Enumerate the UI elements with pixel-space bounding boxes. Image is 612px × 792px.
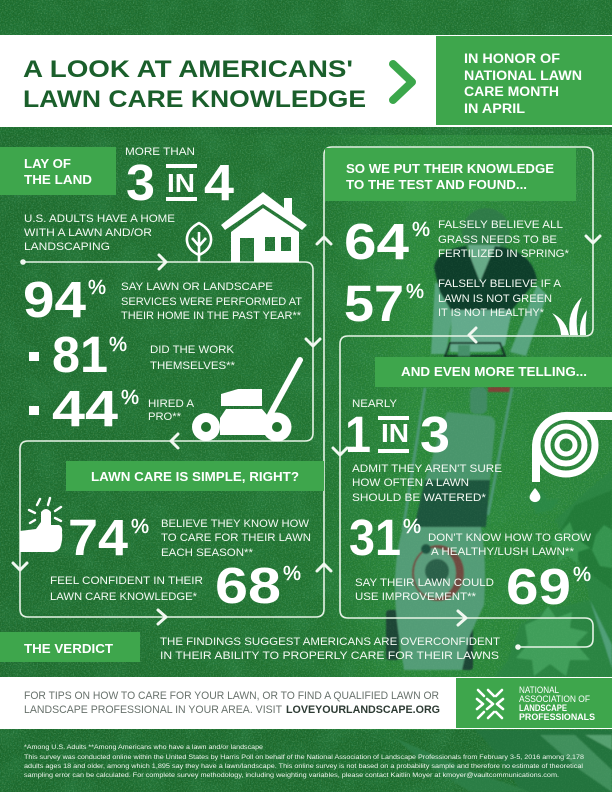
icon: thumbs up <box>20 498 62 552</box>
stat: 64% <box>344 213 570 270</box>
stat: 44% <box>29 380 194 437</box>
stat: 68% <box>50 557 301 614</box>
panel: header band <box>0 35 612 127</box>
stat: nearly 1 in 3: ADMIT THEY AREN'T SURE <box>352 463 502 475</box>
stat: 94% <box>23 271 302 328</box>
stat: 31%: DON'T KNOW HOW TO GROW <box>428 532 591 544</box>
stat: 68%: % <box>283 563 301 585</box>
stat: more than 3 in 4: MORE THAN <box>125 146 195 158</box>
panel: call to action: LANDSCAPE PROFESSIONAL IN YOUR AREA. VISIT <box>24 704 282 716</box>
icon: chevron arrow <box>393 64 412 100</box>
stat: 64%: FERTILIZED IN SPRING* <box>438 248 570 260</box>
stat: more than 3 in 4 <box>125 146 235 211</box>
footnote <box>24 744 584 779</box>
stat: 69% <box>355 558 591 615</box>
title <box>23 56 366 113</box>
text: association name: NATIONAL <box>519 685 559 695</box>
stat: 74%: % <box>131 516 149 538</box>
panel: lawn care is simple: LAWN CARE IS SIMPLE, RIGHT? <box>91 469 299 484</box>
text: adults with a lawn: WITH A LAWN AND/OR <box>24 227 152 239</box>
text: verdict findings: THE FINDINGS SUGGEST AMERICANS ARE OVERCONFIDENT <box>160 636 500 648</box>
panel: association logo <box>456 678 612 728</box>
text: association name: PROFESSIONALS <box>519 712 595 722</box>
stat: 94%: 94 <box>23 271 87 328</box>
panel: and even more telling <box>375 357 612 387</box>
panel: put to the test: SO WE PUT THEIR KNOWLEDGE <box>346 161 554 176</box>
panel: honor box <box>436 36 612 125</box>
icon: grass <box>552 297 587 335</box>
stat: 69%: % <box>573 564 591 586</box>
foliage <box>395 470 612 792</box>
footnote: *Among U.S. Adults **Among Americans who have a lawn and/or landscape <box>24 744 263 751</box>
text: association name: ASSOCIATION OF <box>519 694 590 704</box>
footnote: sampling error can be calculated. For complete survey methodology, including weighting variables, please contact Kaitlin Moyer at kmoyer@vaultcommunications.com. <box>24 772 559 779</box>
flow line with arrows <box>13 147 600 650</box>
panel: honor box: CARE MONTH <box>464 84 559 99</box>
text: adults with a lawn <box>24 213 175 253</box>
stat: 81%: THEMSELVES** <box>150 360 236 372</box>
panel: and even more telling: AND EVEN MORE TELLING... <box>401 364 587 379</box>
stat: more than 3 in 4: 3 <box>126 154 155 211</box>
text: verdict findings <box>160 636 500 662</box>
icon: tree <box>187 223 211 262</box>
panel: put to the test: TO THE TEST AND FOUND... <box>346 177 527 192</box>
panel: honor box: IN APRIL <box>464 101 525 116</box>
panel: call to action: FOR TIPS ON HOW TO CARE FOR YOUR LAWN, OR TO FIND A QUALIFIED LAWN OR <box>24 690 439 702</box>
stat: 81%: 81 <box>52 326 108 383</box>
stat: 57%: IT IS NOT HEALTHY* <box>438 307 545 319</box>
panel: call to action <box>0 677 612 729</box>
panel: honor box: NATIONAL LAWN <box>464 68 582 83</box>
stat: 94%: SERVICES WERE PERFORMED AT <box>121 296 302 308</box>
text: adults with a lawn: U.S. ADULTS HAVE A HOME <box>24 213 175 225</box>
panel: the verdict: THE VERDICT <box>24 641 113 656</box>
panel: the verdict <box>0 632 140 662</box>
stat: 81%: % <box>109 334 127 356</box>
panel: put to the test <box>325 148 576 201</box>
stat: 64%: FALSELY BELIEVE ALL <box>438 219 563 231</box>
stat: 31%: % <box>403 516 421 538</box>
stat: nearly 1 in 3: SHOULD BE WATERED* <box>352 492 487 504</box>
stat: 57%: % <box>406 281 424 303</box>
stat: 81%: DID THE WORK <box>150 344 234 356</box>
stat: 57%: LAWN IS NOT GREEN <box>438 293 552 305</box>
panel: lay of the land <box>0 147 116 195</box>
stat: 69%: 69 <box>506 558 571 615</box>
stat: 64%: 64 <box>344 213 410 270</box>
panel: honor box: IN HONOR OF <box>464 51 560 66</box>
panel: lay of the land: THE LAND <box>24 172 92 187</box>
stat: nearly 1 in 3: 1 <box>345 406 371 463</box>
stat: 81% <box>29 326 236 383</box>
text: verdict findings: IN THEIR ABILITY TO PROPERLY CARE FOR THEIR LAWNS <box>160 650 499 662</box>
stat: 44%: % <box>121 387 139 409</box>
stat: 44%: PRO** <box>148 411 182 423</box>
stat: 74% <box>68 509 311 566</box>
stat: 44%: 44 <box>52 380 119 437</box>
text: association name <box>519 685 595 722</box>
stat: 74%: EACH SEASON** <box>161 547 254 559</box>
stat: 69%: USE IMPROVEMENT** <box>355 591 477 603</box>
stat: nearly 1 in 3: NEARLY <box>352 398 397 410</box>
person <box>431 208 547 414</box>
stat: more than 3 in 4: 4 <box>204 154 235 211</box>
stat: more than 3 in 4: IN <box>167 168 195 198</box>
stat: 64%: GRASS NEEDS TO BE <box>438 234 557 246</box>
stat: 74%: 74 <box>68 509 129 566</box>
stat: 94%: SAY LAWN OR LANDSCAPE <box>121 281 273 293</box>
icon: hose <box>530 416 612 502</box>
panel: lawn care is simple <box>66 461 324 491</box>
stat: 74%: BELIEVE THEY KNOW HOW <box>161 518 309 530</box>
icon: logo mark <box>477 690 503 718</box>
stat: 31%: 31 <box>349 509 401 566</box>
text: adults with a lawn: LANDSCAPING <box>24 241 110 253</box>
stat: 68%: FEEL CONFIDENT IN THEIR <box>50 575 203 587</box>
stat: 31% <box>349 509 591 566</box>
icon: house <box>221 192 307 262</box>
footnote: adults ages 18 and older, among which 1,895 say they have a lawn/landscape. This online survey is not based on a probability sample and therefore no estimate of theoretical <box>24 763 584 770</box>
stat: 44%: HIRED A <box>148 398 194 410</box>
stat: 31%: A HEALTHY/LUSH LAWN** <box>431 546 575 558</box>
stat: nearly 1 in 3 <box>345 398 502 504</box>
stat: 57%: FALSELY BELIEVE IF A <box>438 278 561 290</box>
title: A LOOK AT AMERICANS' <box>23 56 353 83</box>
text: association name: LANDSCAPE <box>519 703 567 713</box>
title: LAWN CARE KNOWLEDGE <box>23 86 366 113</box>
stat: 68%: 68 <box>215 557 281 614</box>
stat: 69%: SAY THEIR LAWN COULD <box>355 577 494 589</box>
stat: nearly 1 in 3: 3 <box>420 406 450 463</box>
stat: 94%: % <box>88 277 106 299</box>
icon: lawn mower <box>192 360 300 442</box>
stat: 74%: TO CARE FOR THEIR LAWN <box>161 532 311 544</box>
stat: 68%: LAWN CARE KNOWLEDGE* <box>50 591 198 603</box>
panel: lay of the land: LAY OF <box>24 156 71 171</box>
mower photo <box>386 388 512 670</box>
footnote: This survey was conducted online within the United States by Harris Poll on behalf of the National Association of Landscape Professionals from February 3-5, 2016 among 2,178 <box>24 754 584 761</box>
stat: 57% <box>344 275 561 332</box>
stat: 94%: THEIR HOME IN THE PAST YEAR** <box>121 310 302 322</box>
stat: 64%: % <box>412 219 430 241</box>
stat: nearly 1 in 3: IN <box>381 418 409 448</box>
panel: call to action: LOVEYOURLANDSCAPE.ORG <box>286 704 440 716</box>
stat: 57%: 57 <box>344 275 404 332</box>
stat: nearly 1 in 3: HOW OFTEN A LAWN <box>352 477 469 489</box>
